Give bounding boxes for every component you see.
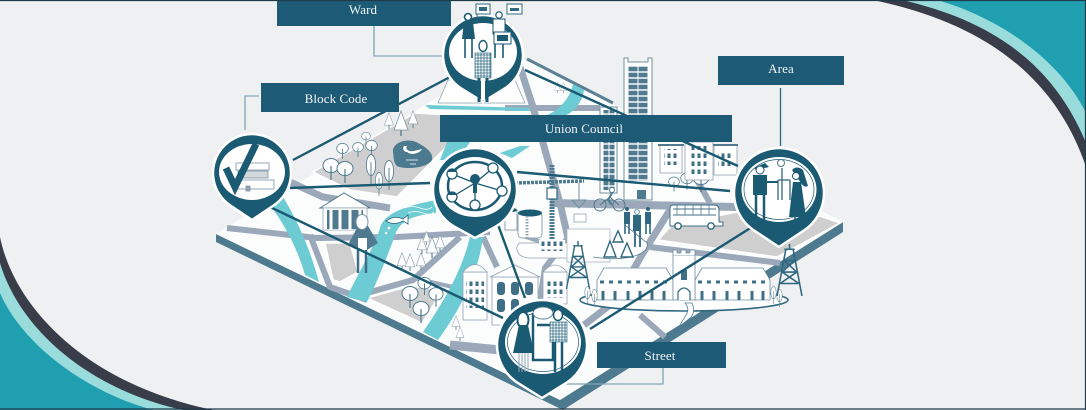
label: ward: Ward bbox=[349, 2, 378, 17]
two people talking bbox=[513, 307, 567, 372]
label: union council bbox=[440, 115, 732, 142]
construction crane bbox=[515, 165, 586, 240]
bus bbox=[670, 205, 723, 229]
label: street bbox=[597, 342, 726, 368]
label: ward bbox=[277, 0, 451, 26]
fish bbox=[385, 215, 408, 234]
network of people bbox=[447, 162, 507, 210]
map base edge bbox=[216, 222, 843, 410]
label: area bbox=[718, 56, 844, 85]
swan pond bbox=[393, 140, 432, 168]
ward plaza bbox=[438, 80, 525, 103]
road workers bbox=[624, 207, 651, 247]
top right corner swoosh bbox=[873, 0, 1086, 167]
label: block code bbox=[261, 83, 399, 112]
check mark bbox=[226, 144, 256, 187]
storage tanks bbox=[505, 208, 542, 238]
teal river bbox=[270, 84, 584, 340]
pin: street bbox=[497, 300, 587, 398]
palace with oval driveway bbox=[580, 250, 788, 326]
office tower small bbox=[600, 107, 617, 193]
classical museum building bbox=[320, 193, 370, 230]
townhouses bbox=[463, 264, 567, 325]
apartment buildings bbox=[658, 142, 738, 180]
judge figure bbox=[349, 214, 378, 273]
grey land blocks bbox=[313, 113, 840, 323]
oil rigs bbox=[566, 241, 802, 296]
office tower large bbox=[624, 58, 652, 200]
label: block code: Block Code bbox=[305, 91, 367, 106]
map face bbox=[216, 52, 843, 400]
pin: block code bbox=[213, 134, 291, 220]
cyclist bbox=[594, 188, 625, 211]
pin: ward bbox=[443, 4, 523, 102]
protesters bbox=[462, 4, 522, 102]
connector lines between pins bbox=[270, 70, 752, 329]
construction site and cones bbox=[517, 214, 647, 262]
residents bbox=[753, 160, 808, 223]
isometric city map bbox=[216, 52, 843, 410]
label: street: Street bbox=[645, 348, 676, 363]
bottom left corner swoosh bbox=[0, 237, 213, 410]
leader lines from labels bbox=[245, 26, 780, 384]
road network bbox=[227, 67, 780, 350]
books stack bbox=[235, 163, 274, 191]
pin: area bbox=[734, 148, 824, 247]
river waves bbox=[405, 206, 434, 214]
label: union council: Union Council bbox=[545, 121, 623, 136]
pin: union council bbox=[433, 148, 517, 238]
top right map edge bbox=[527, 59, 613, 103]
label: area: Area bbox=[768, 61, 794, 76]
trees bbox=[323, 82, 709, 341]
